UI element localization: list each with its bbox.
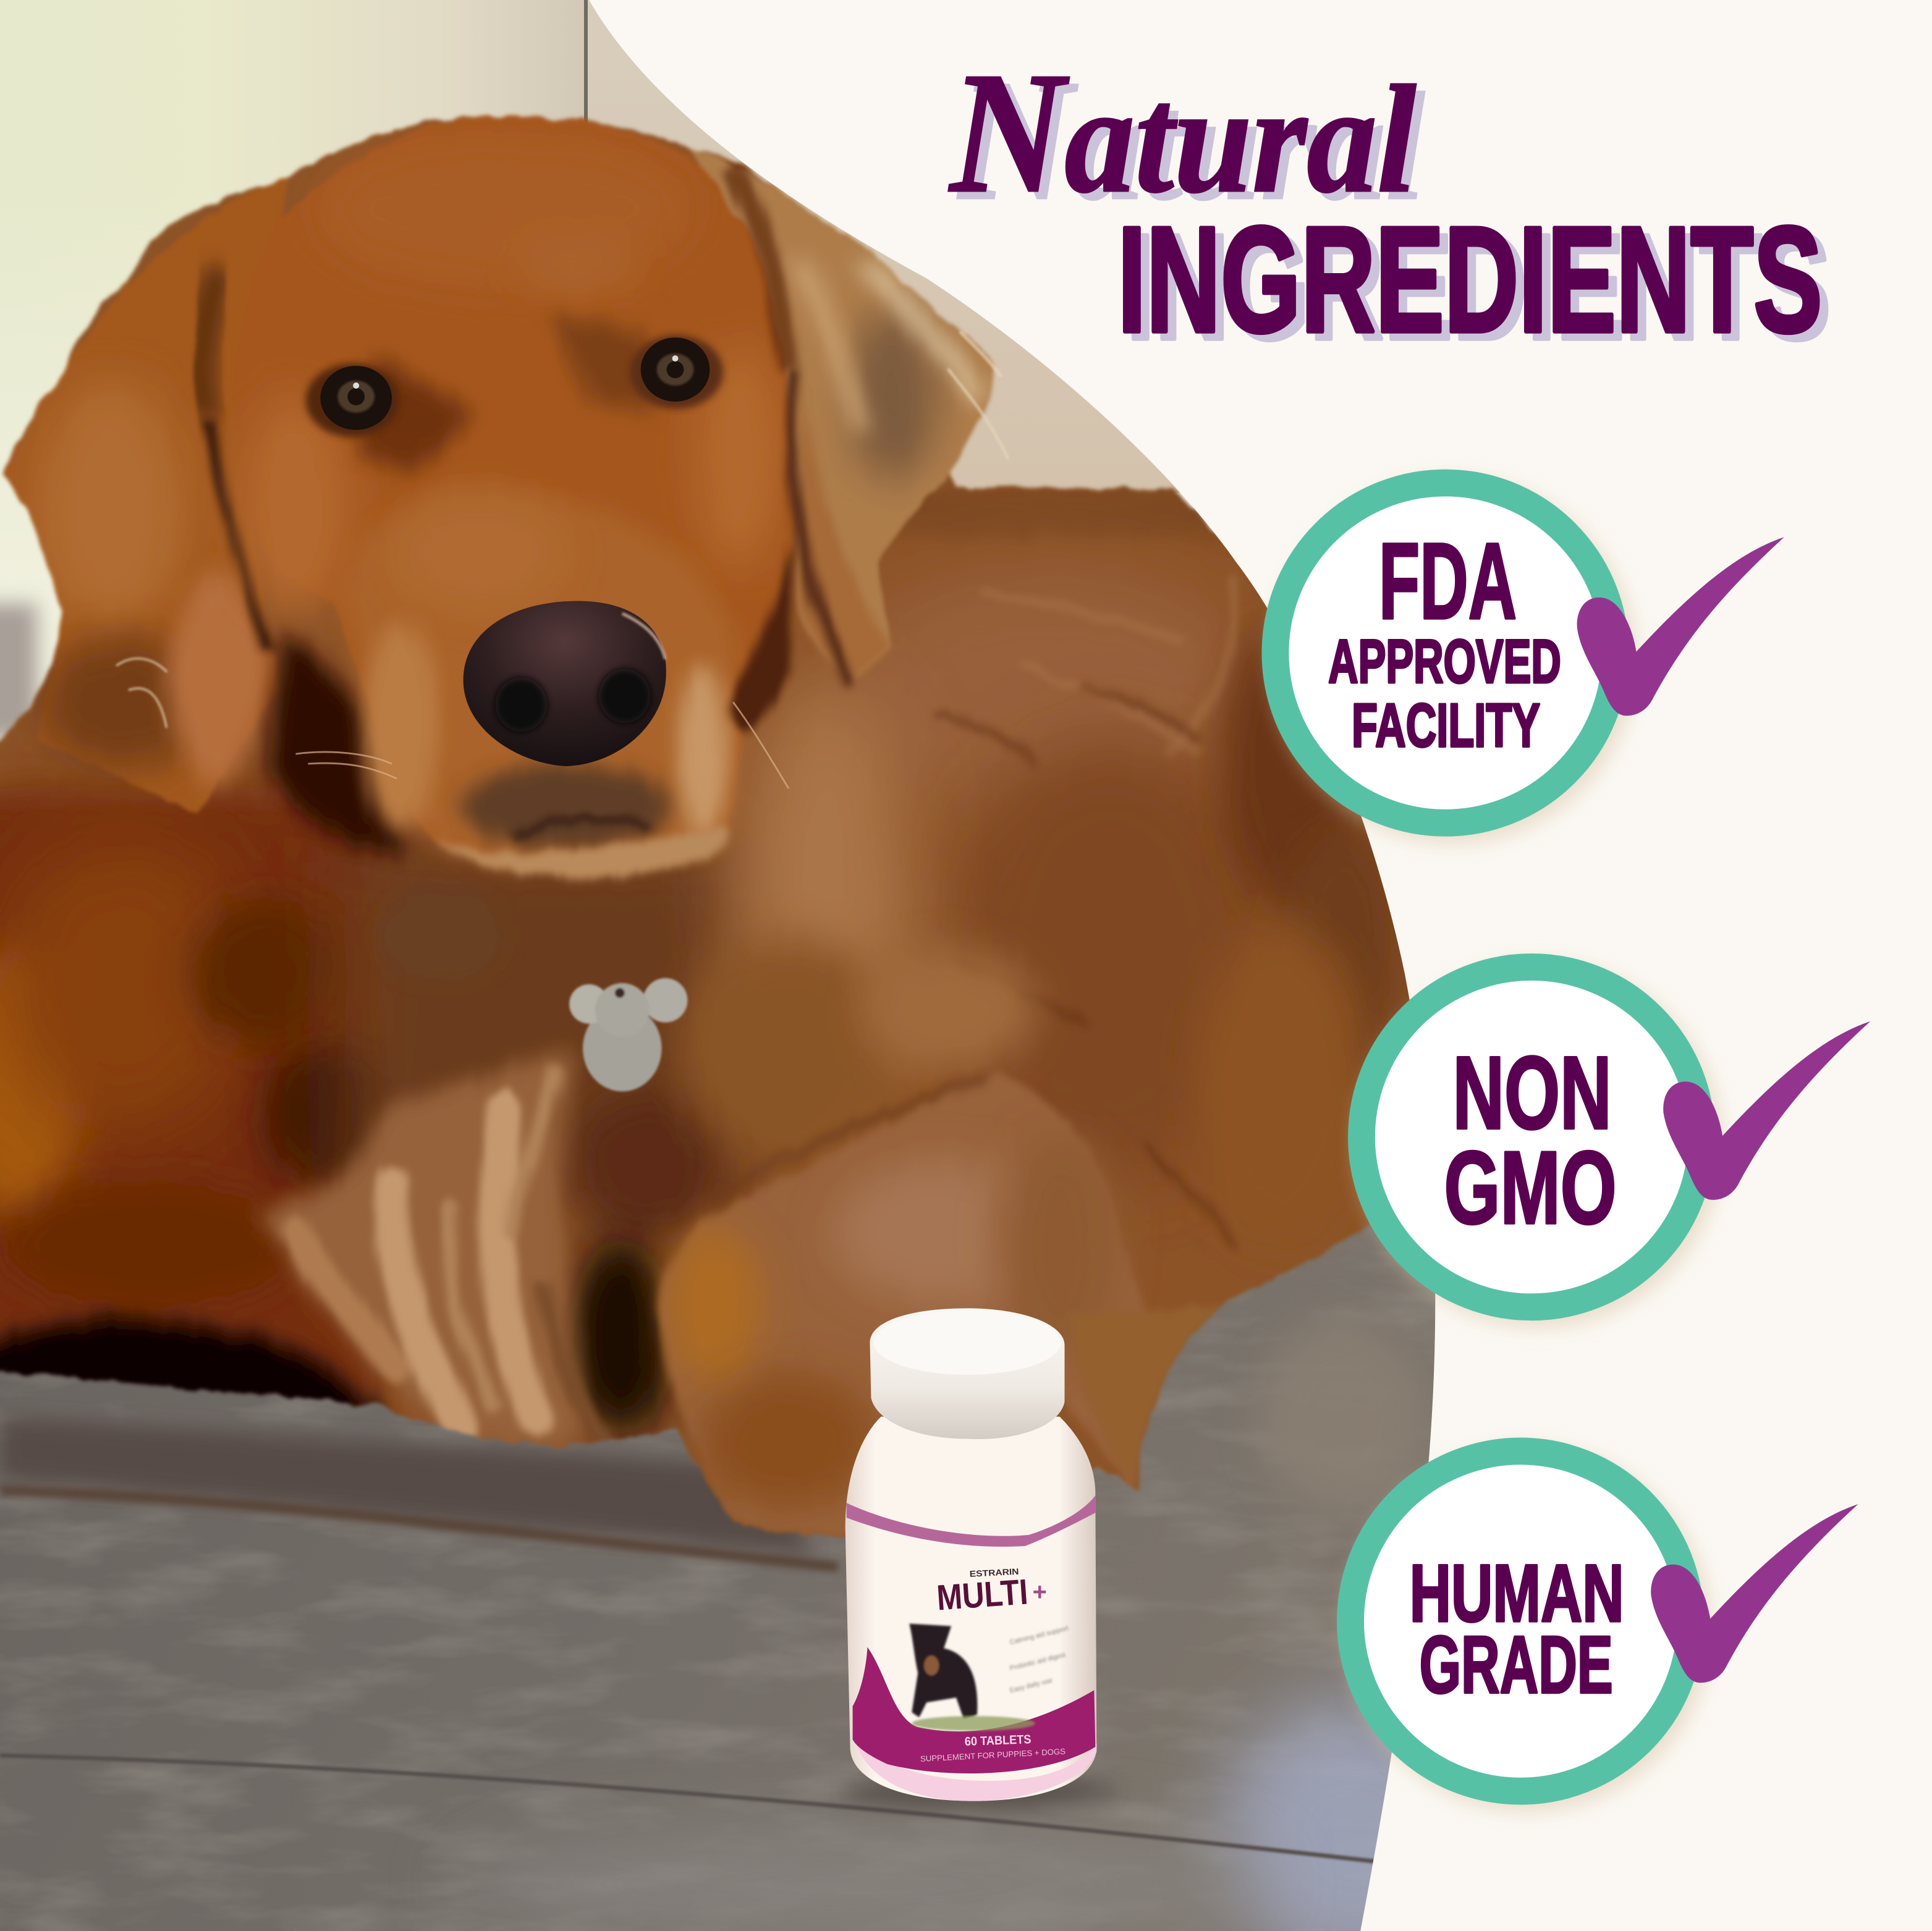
icon: check mark	[1663, 1021, 1870, 1200]
badge text: GMO	[1444, 1130, 1617, 1246]
foreleg and paw	[657, 1074, 1224, 1540]
badge text	[1410, 1548, 1624, 1710]
left ear	[6, 177, 289, 813]
badge: non GMO	[1355, 961, 1870, 1328]
ear wisps	[117, 332, 1008, 727]
wall	[0, 0, 1180, 742]
benefit lines: Easy daily use	[1009, 1676, 1053, 1694]
icon: check mark	[1651, 1504, 1858, 1683]
badge text	[1328, 521, 1561, 760]
benefit lines: Calming aid support	[1009, 1625, 1069, 1646]
product name: MULTI	[936, 1572, 1029, 1618]
bottle base tint	[852, 1731, 1096, 1801]
left eye	[305, 363, 399, 437]
icon: check mark	[1577, 537, 1784, 716]
title: Natural: Natural	[956, 44, 1425, 237]
collar tag	[569, 978, 687, 1091]
right ear	[690, 148, 992, 730]
neck and chest	[260, 677, 1035, 1446]
nose	[464, 601, 666, 766]
photo: dog with supplement bottle	[0, 0, 1491, 1931]
badge text: GRADE	[1420, 1619, 1613, 1710]
label band	[847, 1495, 1095, 1547]
floor	[0, 1195, 1491, 1931]
benefit lines	[1009, 1625, 1069, 1694]
right eye	[630, 335, 723, 409]
bottle body	[845, 1417, 1096, 1801]
back and flank	[838, 488, 1405, 1244]
label swoosh	[853, 1647, 1095, 1773]
brand text: ESTRARIN	[969, 1566, 1019, 1579]
under-chest shadow	[0, 1319, 394, 1442]
supplement bottle	[842, 1308, 1117, 1810]
whiskers	[295, 702, 789, 788]
supplement text: SUPPLEMENT FOR PUPPIES + DOGS	[920, 1747, 1066, 1764]
badge: FDA approved facility	[1269, 477, 1784, 844]
dark neck gap	[268, 632, 402, 858]
bottle cap	[870, 1308, 1064, 1439]
badge text: HUMAN	[1410, 1548, 1624, 1639]
title: Natural: Natural	[947, 36, 1416, 229]
badge text: FACILITY	[1352, 691, 1540, 760]
plus sign: +	[1033, 1579, 1047, 1606]
badge text: APPROVED	[1328, 627, 1561, 696]
head base	[235, 116, 792, 877]
badge text	[1444, 1035, 1617, 1246]
tablets text: 60 TABLETS	[964, 1733, 1032, 1749]
badge text: NON	[1452, 1035, 1612, 1151]
badge text: FDA	[1379, 521, 1517, 642]
muzzle	[341, 486, 739, 869]
badge: human grade	[1344, 1445, 1858, 1812]
dog body and head fur	[0, 111, 1478, 1552]
left body	[0, 788, 400, 1429]
benefit lines: Probiotic aid digest	[1009, 1651, 1066, 1672]
label dog	[909, 1624, 1035, 1731]
